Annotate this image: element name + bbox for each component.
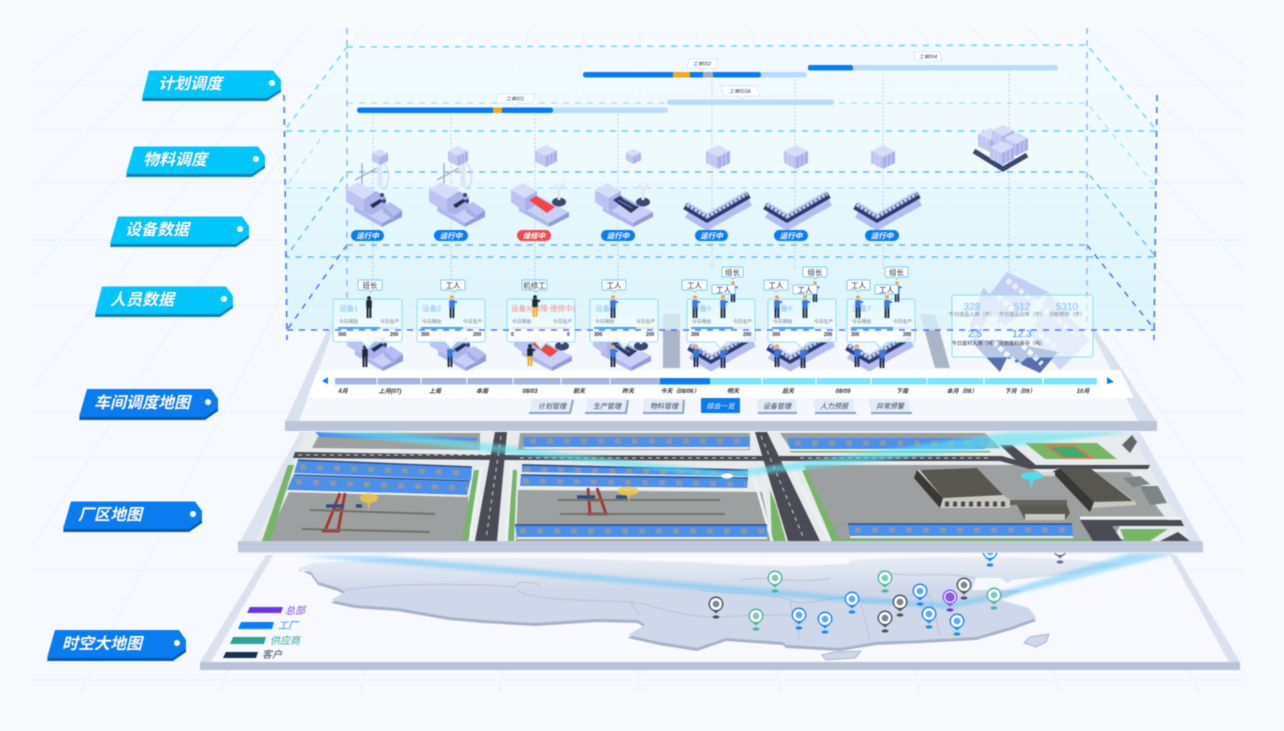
timeline labels: 本月（08）	[947, 387, 977, 395]
material cubes	[372, 145, 895, 169]
label: personnel data	[95, 286, 233, 317]
device cards: 今日生产	[814, 318, 833, 325]
device cards: 今日生产	[636, 318, 655, 325]
status pills: 运行中	[440, 231, 464, 240]
timeline labels: 08/03	[522, 389, 538, 395]
device cards: 200	[646, 332, 655, 338]
navigation buttons: 人力预报	[820, 402, 849, 410]
device cards: 今日生产	[380, 318, 399, 325]
label: personnel data: 人员数据	[110, 291, 177, 309]
legend: 供应商	[270, 635, 302, 647]
gantt bars	[357, 65, 1058, 113]
status pills: 运行中	[700, 231, 724, 240]
timeline labels: 4月	[337, 388, 349, 395]
warehouse statistics card: 2.5	[968, 329, 982, 340]
label: plan scheduling	[142, 70, 281, 101]
device cards	[333, 299, 915, 349]
panel: factory area map layer	[238, 432, 1203, 553]
navigation buttons: 生产管理	[593, 402, 622, 410]
Hainan island	[822, 651, 861, 660]
worker role bubbles: 工人	[446, 281, 461, 290]
status pills: 维修中	[523, 231, 547, 240]
Taiwan island	[1024, 634, 1049, 647]
worker role bubbles: 工人	[851, 281, 866, 290]
warehouse racks	[970, 272, 1090, 373]
navigation buttons: 物料管理	[650, 402, 679, 410]
worker role bubbles: 组长	[889, 267, 904, 277]
gantry cranes	[322, 488, 608, 531]
device cards: 今日用验	[692, 318, 711, 325]
worker role bubbles: 组长	[725, 267, 740, 277]
legend: 客户	[262, 649, 283, 661]
timeline labels: 昨天	[622, 387, 635, 395]
dotted link lines	[373, 70, 1009, 285]
timeline labels	[337, 387, 1090, 395]
label: workshop scheduling map	[79, 389, 218, 420]
gantt callouts: 工单004	[919, 54, 937, 60]
device cards: 300	[338, 332, 347, 338]
device cards: 设备1	[339, 303, 358, 313]
workshop workers	[362, 344, 887, 368]
warehouse statistics card: 当前库存（件）	[1049, 310, 1085, 318]
device cards: 今日用验	[512, 318, 531, 325]
worker role bubbles: 工人	[879, 286, 894, 294]
device cards: 200	[473, 332, 482, 338]
warehouse statistics card: 今日成品入库（件）	[949, 310, 995, 318]
device cards: 设备7	[852, 303, 871, 313]
label: equipment data	[110, 216, 249, 247]
light beam to map	[300, 553, 1178, 609]
sidewalks	[470, 462, 1182, 541]
device cards: 今日生产	[463, 318, 482, 325]
worker role bubbles: 组长	[808, 267, 823, 277]
status pills: 运行中	[607, 231, 631, 240]
label: plan scheduling: 计划调度	[158, 75, 225, 93]
dark factory buildings	[914, 435, 1167, 520]
panel: workshop scheduling map layer	[285, 314, 1157, 431]
navigation buttons: 异常预警	[876, 402, 905, 410]
device cards: 设备6	[773, 303, 792, 313]
panel: translucent data planes	[284, 45, 1157, 330]
light beam to factory	[315, 432, 1135, 478]
worker role bubbles: 机修工	[523, 280, 546, 290]
device cards: 200	[903, 332, 912, 338]
device cards: 0	[567, 332, 570, 338]
legend	[223, 605, 307, 661]
timeline labels: 本周	[476, 387, 489, 395]
timeline labels: 08/09	[835, 389, 851, 395]
device cards: 200	[390, 332, 399, 338]
timeline labels: 10月	[1077, 388, 1090, 395]
status pills: 运行中	[780, 231, 804, 240]
device cards: 0	[511, 332, 514, 338]
worker role bubbles: 工人	[606, 281, 622, 290]
sports field	[1047, 446, 1092, 458]
worker role bubbles: 工人	[798, 286, 813, 294]
roads	[293, 432, 1190, 541]
gantt callouts: 工单003A	[729, 88, 751, 95]
warehouse statistics card	[949, 295, 1093, 362]
front dashed edges	[284, 95, 1157, 340]
navigation buttons: 计划管理	[538, 402, 567, 410]
gantt callouts: 工单002	[693, 60, 711, 68]
device cards: 200	[743, 332, 752, 338]
gantt callouts	[496, 52, 942, 106]
label: workshop scheduling map: 车间调度地图	[94, 394, 193, 412]
device cards: 今日用验	[852, 318, 871, 325]
robot arms	[355, 160, 472, 190]
worker role bubbles: 班长	[362, 280, 378, 290]
device cards: 今日生产	[893, 318, 912, 325]
legend: 总部	[285, 605, 307, 617]
label: material scheduling: 物料调度	[143, 151, 210, 169]
yard rails	[302, 500, 725, 532]
status pills: 运行中	[356, 231, 380, 240]
navigation buttons	[529, 398, 912, 413]
ground areas	[266, 433, 1172, 541]
device cards: 300	[691, 332, 700, 338]
warehouse statistics card: 512	[1014, 302, 1031, 313]
timeline strip	[307, 370, 1134, 398]
timeline bar	[322, 377, 1114, 385]
status pills: 运行中	[871, 231, 895, 240]
device cards: 今日用验	[422, 318, 441, 325]
timeline labels: 下周	[896, 388, 909, 395]
worker role bubbles: 工人	[687, 281, 702, 290]
device cards: 300	[851, 332, 860, 338]
label: equipment data: 设备数据	[125, 221, 192, 239]
map pins	[708, 542, 1068, 636]
equipment machines	[346, 182, 920, 227]
device cards: 设备5	[692, 303, 711, 313]
device cards: 今日生产	[733, 318, 752, 325]
warehouse statistics card: 当前废料库存（吨）	[999, 339, 1045, 347]
device cards: 设备4	[595, 303, 614, 313]
device cards: 设备2	[422, 303, 441, 313]
label: factory area map	[63, 502, 202, 532]
label: space-time national map: 时空大地图	[62, 635, 145, 653]
timeline labels: 上月(07)	[379, 387, 401, 395]
panel: space-time national map layer	[200, 542, 1240, 670]
blue workshop roofs	[287, 432, 1073, 537]
warehouse statistics card: 今日废料入库（吨）	[952, 339, 998, 347]
warehouse statistics card: 5310	[1056, 302, 1079, 313]
legend: 工厂	[278, 621, 300, 632]
warehouse statistics card: 今日成品出库（件）	[999, 310, 1045, 318]
device cards: 今日生产	[553, 318, 572, 325]
label: factory area map: 厂区地图	[78, 506, 145, 524]
warehouse statistics card: 12.3	[1012, 329, 1032, 340]
workshop aisles	[663, 314, 680, 368]
device cards: 200	[824, 332, 833, 338]
worker role bubbles: 工人	[716, 286, 731, 294]
device cards: 今日用验	[595, 318, 614, 325]
timeline labels: 前天	[573, 387, 586, 395]
device cards: 设备3(故障-维修中)	[511, 303, 576, 313]
material pallet stack	[974, 125, 1028, 169]
workshop machines	[347, 326, 912, 371]
navigation buttons: 综合一览	[706, 402, 735, 410]
warehouse statistics card: 328	[964, 302, 981, 313]
gantt callouts: 工单001	[506, 96, 524, 102]
plane dashed outlines	[284, 28, 1157, 330]
timeline labels: 明天	[727, 388, 740, 395]
green verges	[262, 443, 1168, 541]
navigation buttons: 设备管理	[763, 402, 792, 410]
status pills	[351, 230, 899, 241]
device cards: 300	[421, 332, 430, 338]
cyan location marker	[1021, 472, 1043, 490]
device cards: 300	[772, 332, 781, 338]
timeline labels: 下月（09）	[1005, 387, 1035, 395]
label: space-time national map	[47, 630, 186, 661]
label: material scheduling	[126, 146, 265, 177]
worker role bubbles: 工人	[768, 281, 784, 290]
timeline labels: 今天（08/06）	[660, 387, 700, 395]
worker role bubbles	[358, 267, 908, 296]
timeline labels: 后天	[782, 387, 795, 395]
vehicles	[326, 497, 628, 506]
yellow location markers	[360, 486, 639, 511]
device cards: 今日用验	[339, 318, 358, 325]
device cards: 300	[594, 332, 603, 338]
device cards: 今日用验	[773, 318, 792, 325]
upper workers	[366, 281, 902, 318]
timeline labels: 上周	[429, 387, 442, 395]
